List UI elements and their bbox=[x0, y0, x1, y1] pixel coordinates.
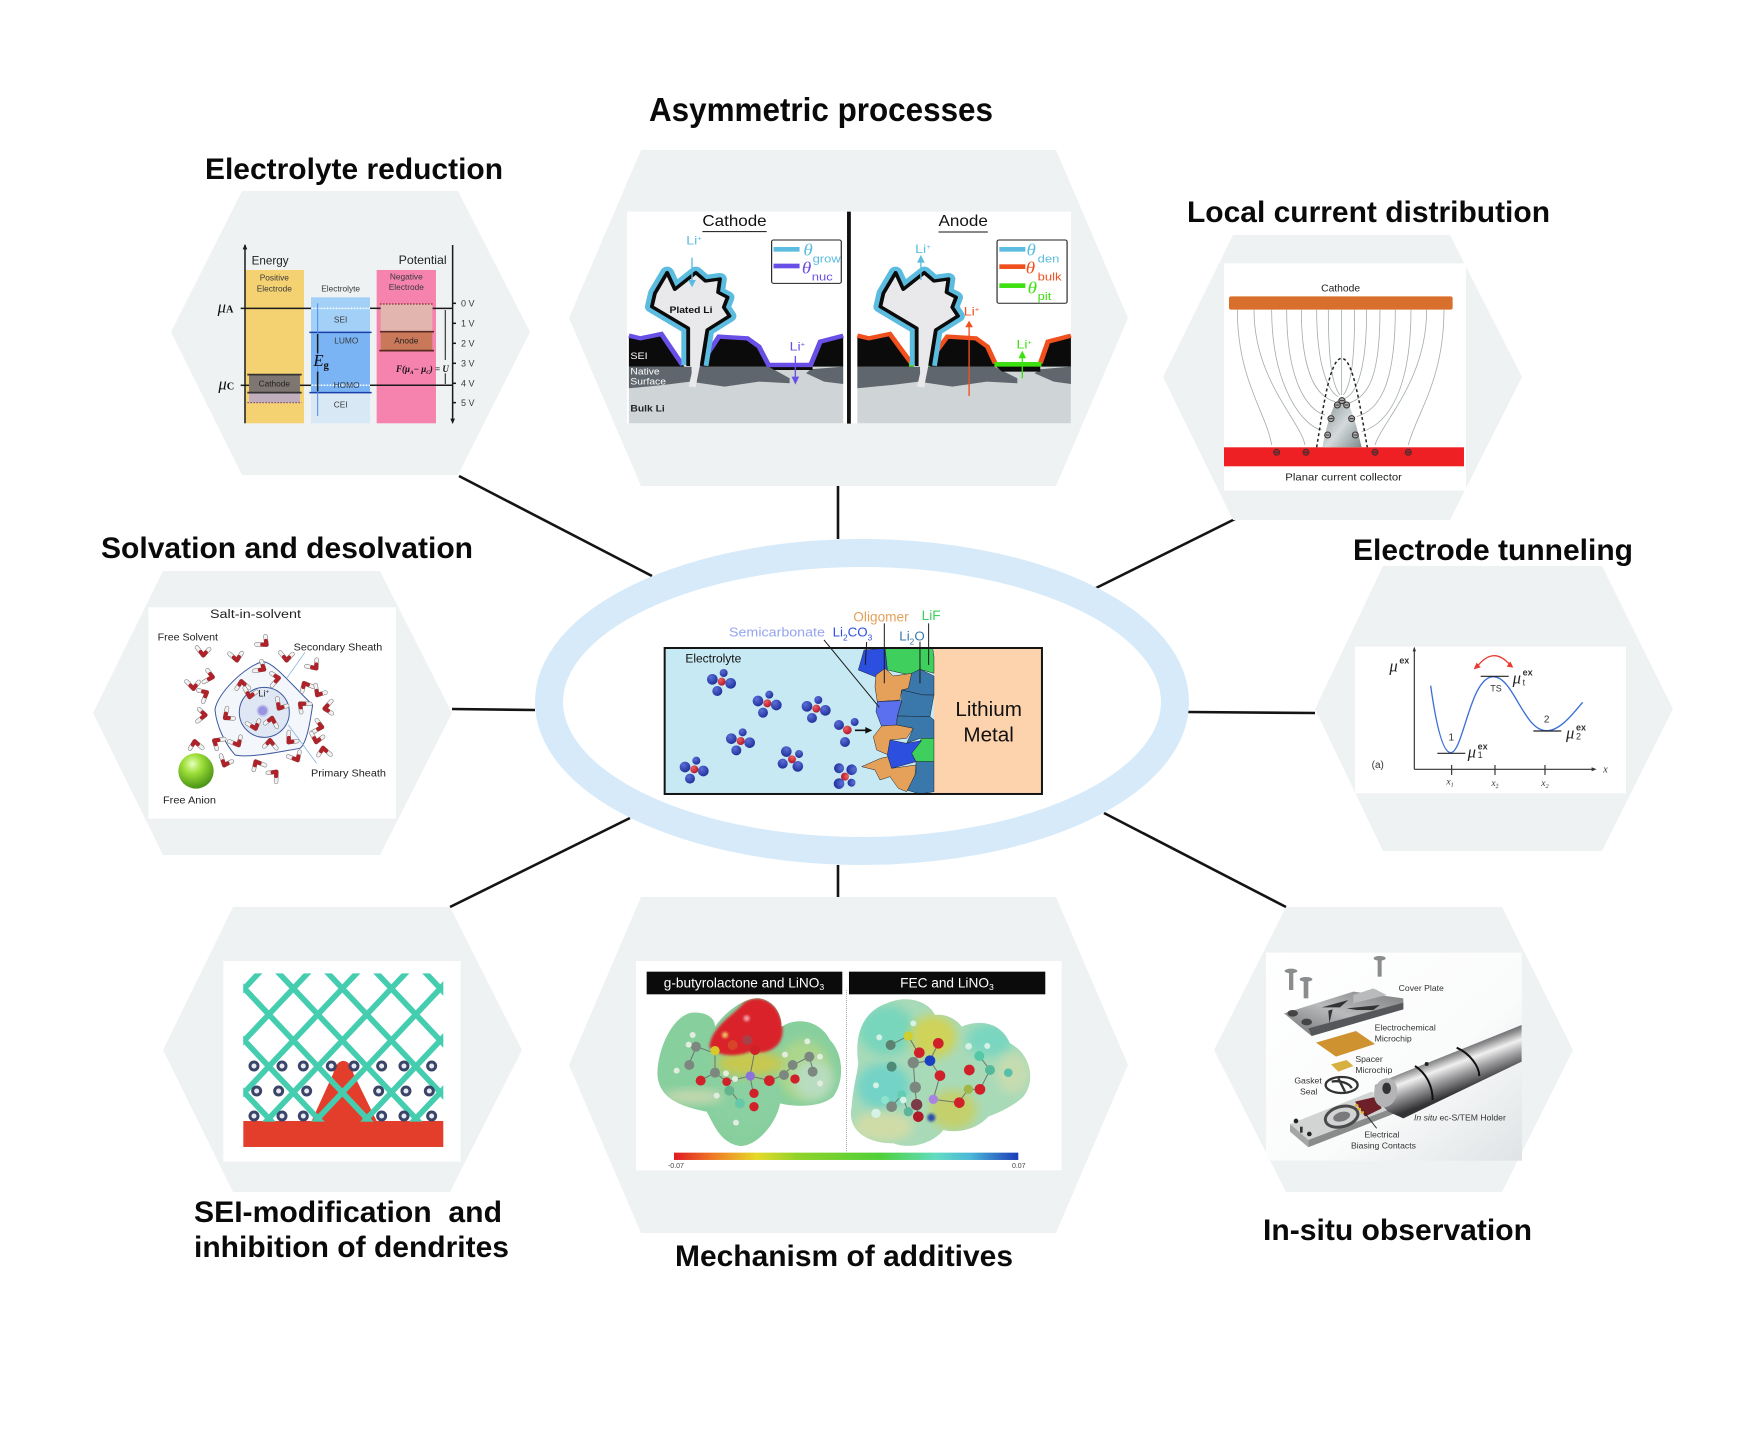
heading: In-situ observation bbox=[1263, 1214, 1532, 1247]
labels: Free Anion bbox=[163, 796, 216, 807]
chart labels: 1 bbox=[1478, 750, 1483, 760]
labels: Primary Sheath bbox=[311, 769, 386, 780]
cathode bar bbox=[1229, 296, 1453, 310]
energy landscape chart bbox=[1355, 647, 1626, 793]
sheath leader lines bbox=[287, 652, 317, 763]
header bars bbox=[647, 972, 1045, 994]
solvation figure bbox=[148, 607, 396, 819]
SEI schematic bbox=[665, 608, 1042, 795]
chart labels: (a) bbox=[1372, 760, 1384, 771]
Li+ arrows bbox=[688, 255, 1026, 396]
heading: Mechanism of additives bbox=[675, 1240, 1013, 1273]
heading: inhibition of dendrites bbox=[194, 1231, 509, 1264]
screws bbox=[1285, 956, 1386, 998]
connector lines bbox=[450, 476, 1315, 907]
process labels: + bbox=[697, 235, 702, 242]
header bars: 3 bbox=[819, 982, 824, 992]
holder tip plate bbox=[1290, 1092, 1397, 1147]
lithium wedge over lattice bbox=[325, 1100, 362, 1121]
process labels bbox=[630, 233, 1032, 414]
TEM holder figure bbox=[1266, 953, 1522, 1161]
negative electrode column bbox=[377, 270, 436, 423]
free anion bbox=[178, 753, 214, 789]
anode legend bbox=[997, 240, 1067, 303]
chart labels bbox=[1372, 655, 1608, 790]
right atoms bbox=[871, 1020, 1013, 1122]
field lines bbox=[1237, 310, 1444, 445]
box outline bbox=[665, 648, 1042, 794]
process labels: Plated Li bbox=[669, 306, 712, 316]
process labels: Li bbox=[1017, 337, 1028, 351]
labels: Planar current collector bbox=[1285, 472, 1403, 483]
lithium base and dendrite bbox=[243, 1061, 443, 1147]
hexagon bbox=[569, 897, 1128, 1233]
dotted divider bbox=[845, 990, 847, 1152]
panel: asymmetric processes bbox=[569, 91, 1128, 486]
hexagon bbox=[569, 150, 1128, 486]
current collector figure bbox=[1224, 263, 1466, 491]
electrostatic potential maps bbox=[636, 961, 1062, 1170]
primary sheath bbox=[239, 687, 289, 737]
axis arrowheads bbox=[1413, 647, 1597, 771]
colour scale bbox=[668, 1153, 1026, 1170]
diagram labels: μC bbox=[217, 374, 234, 393]
red current collector bbox=[1224, 447, 1464, 466]
level lines and axes bbox=[241, 245, 456, 423]
grain labels: Li bbox=[833, 625, 843, 640]
diagram labels: SEI bbox=[334, 315, 347, 325]
central divider bbox=[847, 212, 851, 424]
chart labels: ex bbox=[1576, 723, 1586, 733]
electrochemical microchip bbox=[1316, 1031, 1375, 1057]
grain labels: 2 bbox=[910, 637, 915, 647]
chart labels: x bbox=[1446, 776, 1451, 787]
cathode legend bbox=[772, 240, 841, 283]
diagram labels: 1 V bbox=[461, 319, 474, 329]
chart labels: TS bbox=[1490, 683, 1502, 693]
white background bbox=[223, 961, 461, 1162]
anode block bbox=[379, 304, 434, 351]
secondary sheath bbox=[215, 662, 313, 756]
labels: Microchip bbox=[1355, 1065, 1393, 1075]
labels bbox=[1285, 283, 1403, 483]
anode legend: θ bbox=[1028, 278, 1037, 297]
dashed envelope bbox=[1317, 358, 1367, 447]
grain labels: Metal bbox=[963, 724, 1014, 747]
grain labels: 2 bbox=[843, 633, 848, 643]
labels: Cover Plate bbox=[1399, 983, 1444, 993]
positive electrode column bbox=[245, 270, 304, 423]
heading: Solvation and desolvation bbox=[101, 532, 473, 565]
diagram labels: Electrode bbox=[257, 283, 292, 293]
cathode legend: θ bbox=[803, 240, 813, 259]
labels bbox=[1294, 983, 1506, 1151]
cathode legend: nuc bbox=[812, 270, 833, 283]
labels: Seal bbox=[1300, 1087, 1317, 1097]
arrow into SEI bbox=[855, 727, 872, 734]
diagram labels: − μ bbox=[414, 364, 426, 374]
grain labels: 3 bbox=[868, 633, 873, 643]
labels: Free Solvent bbox=[158, 633, 218, 644]
white background bbox=[636, 961, 1062, 1170]
labels: Spacer bbox=[1355, 1054, 1383, 1064]
grain labels bbox=[685, 608, 1022, 747]
white background bbox=[1224, 263, 1466, 491]
panel: electrolyte reduction bbox=[171, 153, 530, 475]
labels: Electrical bbox=[1364, 1130, 1400, 1140]
anode legend: pit bbox=[1038, 290, 1052, 303]
diagram labels: 0 V bbox=[461, 299, 474, 309]
colour scale: -0.07 bbox=[668, 1163, 684, 1170]
axes bbox=[1414, 648, 1593, 775]
chart labels: ex bbox=[1399, 655, 1409, 665]
labels bbox=[158, 607, 386, 807]
grain labels: LiF bbox=[922, 608, 941, 623]
diagram labels: 4 V bbox=[461, 379, 474, 389]
diagram labels: F(μ bbox=[396, 364, 410, 374]
chart labels: x bbox=[1491, 778, 1496, 789]
electrolyte box bbox=[665, 648, 1042, 794]
red double arrow bbox=[1474, 656, 1513, 669]
side titles: Cathode bbox=[702, 213, 767, 230]
chart labels: 2 bbox=[1544, 714, 1550, 725]
labels: Biasing Contacts bbox=[1351, 1141, 1417, 1151]
grain labels: CO bbox=[848, 625, 868, 640]
grain labels: Lithium bbox=[955, 698, 1022, 721]
diagram labels: ) = U bbox=[429, 364, 449, 374]
axis arrowheads bbox=[243, 244, 455, 424]
lithium ions bbox=[250, 1062, 436, 1120]
holder barrel bbox=[1371, 1025, 1522, 1118]
process labels: Li bbox=[964, 304, 975, 318]
grain labels: Semicarbonate bbox=[729, 626, 825, 640]
chart labels: μ bbox=[1467, 742, 1476, 761]
anode legend: bulk bbox=[1038, 270, 1062, 283]
process labels: Surface bbox=[630, 377, 666, 387]
right surface bbox=[848, 995, 1035, 1150]
chart labels: 2 bbox=[1576, 731, 1581, 741]
teal lattice bbox=[243, 973, 444, 1122]
anode legend: θ bbox=[1026, 258, 1035, 277]
diagram labels: Energy bbox=[252, 255, 289, 268]
cathode legend: θ bbox=[802, 258, 811, 277]
heading: Local current distribution bbox=[1187, 196, 1550, 229]
spacer microchip bbox=[1331, 1060, 1353, 1072]
panel: solvation and desolvation bbox=[93, 532, 473, 855]
anode side bbox=[857, 273, 1071, 423]
central panel: SEI on lithium metal bbox=[549, 553, 1175, 851]
labels: Electrochemical bbox=[1375, 1022, 1436, 1032]
blue curve bbox=[1431, 677, 1583, 753]
diagram labels: E bbox=[313, 351, 324, 370]
chart labels: 2 bbox=[1546, 784, 1549, 790]
anode legend: den bbox=[1038, 252, 1059, 265]
SEI grains bbox=[858, 648, 934, 794]
chart labels: ex bbox=[1478, 741, 1488, 751]
heading bbox=[194, 1196, 509, 1264]
diagram labels bbox=[217, 254, 474, 410]
diagram labels: Potential bbox=[399, 254, 447, 267]
labels: Li bbox=[258, 689, 266, 699]
hexagon bbox=[1315, 566, 1673, 851]
diagram labels: 5 V bbox=[461, 398, 474, 408]
electrolyte column bbox=[311, 297, 370, 423]
white background bbox=[1355, 647, 1626, 793]
process labels: Li bbox=[686, 233, 697, 247]
diagram labels: Positive bbox=[260, 273, 289, 283]
hexagon bbox=[171, 191, 530, 475]
heading: Electrode tunneling bbox=[1353, 534, 1633, 567]
side titles bbox=[702, 213, 988, 232]
cathode block bbox=[247, 375, 302, 403]
solvent molecules bbox=[185, 636, 334, 783]
hexagon bbox=[163, 907, 522, 1192]
lithium metal block bbox=[934, 648, 1042, 794]
panel: in-situ observation bbox=[1214, 907, 1573, 1247]
panel: mechanism of additives bbox=[569, 897, 1128, 1273]
chart labels: ‡ bbox=[1496, 784, 1500, 790]
labels: + bbox=[266, 689, 270, 695]
labels: Secondary Sheath bbox=[294, 643, 382, 654]
process labels: + bbox=[801, 341, 805, 348]
diagram labels: A bbox=[409, 370, 414, 376]
panel: SEI modification bbox=[163, 907, 522, 1258]
diagram labels: CEI bbox=[334, 400, 348, 410]
diagram labels: C bbox=[426, 370, 430, 376]
lithium ion bbox=[257, 705, 268, 716]
side titles: Anode bbox=[938, 213, 988, 230]
grain labels: Li bbox=[899, 629, 910, 644]
gasket seal bbox=[1326, 1077, 1358, 1093]
chart labels: x bbox=[1541, 778, 1546, 789]
electrons bbox=[1274, 398, 1411, 455]
hexagon bbox=[1163, 235, 1522, 520]
process labels: Native bbox=[630, 367, 660, 377]
grain labels: O bbox=[914, 629, 925, 644]
process labels: + bbox=[926, 243, 931, 251]
labels: In situ ec-S/TEM Holder bbox=[1414, 1112, 1506, 1122]
dendrite bbox=[1322, 397, 1362, 447]
diagram labels: μA bbox=[217, 298, 234, 317]
process labels: SEI bbox=[630, 352, 648, 362]
diagram labels: g bbox=[324, 361, 330, 372]
cover plate bbox=[1284, 988, 1403, 1036]
ring ellipse bbox=[549, 553, 1175, 851]
header bars: g-butyrolactone and LiNO bbox=[664, 975, 819, 990]
chart labels: t bbox=[1523, 677, 1526, 687]
cathode legend: grow bbox=[813, 252, 841, 265]
cathode and anode schematic bbox=[627, 212, 1071, 424]
anode legend: θ bbox=[1027, 240, 1036, 259]
hexagon bbox=[1214, 907, 1573, 1192]
panel: electrode tunneling bbox=[1315, 534, 1673, 851]
process labels: Bulk Li bbox=[630, 404, 665, 414]
chart labels: 1 bbox=[1451, 782, 1454, 788]
chart labels: μ bbox=[1565, 723, 1574, 742]
chart labels: x bbox=[1602, 765, 1608, 776]
diagram labels: Electrolyte bbox=[321, 284, 360, 294]
chart labels: μ bbox=[1388, 656, 1398, 675]
level markers bbox=[1437, 676, 1561, 753]
hexagon bbox=[93, 571, 452, 855]
diagram labels: HOMO bbox=[334, 380, 360, 390]
header bars: FEC and LiNO bbox=[900, 975, 989, 990]
left surface bbox=[653, 995, 847, 1150]
white background bbox=[148, 607, 396, 819]
process labels: Li bbox=[790, 339, 801, 353]
process labels: + bbox=[975, 306, 979, 314]
energy diagram bbox=[217, 244, 474, 424]
labels: Cathode bbox=[1321, 283, 1360, 294]
process labels: Li bbox=[915, 242, 926, 256]
chart labels: 1 bbox=[1449, 733, 1455, 744]
grain labels: Electrolyte bbox=[685, 652, 742, 666]
labels: Microchip bbox=[1375, 1033, 1412, 1043]
background bbox=[1266, 953, 1522, 1161]
chart labels: μ bbox=[1512, 668, 1521, 687]
diagram labels: 3 V bbox=[461, 359, 474, 369]
cathode side bbox=[629, 273, 843, 423]
diagram labels: Anode bbox=[394, 336, 419, 346]
salt molecules bbox=[680, 669, 863, 795]
diagram labels: LUMO bbox=[334, 335, 359, 345]
chart labels: ex bbox=[1523, 667, 1533, 677]
process labels: + bbox=[1028, 339, 1032, 346]
grain labels: Oligomer bbox=[853, 610, 909, 625]
diagram labels: Cathode bbox=[259, 379, 290, 389]
heading: SEI-modification and bbox=[194, 1196, 502, 1229]
diagram labels: Negative bbox=[390, 272, 423, 282]
header bars: 3 bbox=[989, 982, 994, 992]
colour scale: 0.07 bbox=[1012, 1163, 1026, 1170]
panel: local current distribution bbox=[1163, 196, 1550, 520]
left atoms bbox=[674, 1032, 823, 1126]
diagram labels: Electrode bbox=[389, 282, 424, 292]
heading: Electrolyte reduction bbox=[205, 153, 503, 186]
labels: Salt-in-solvent bbox=[210, 607, 302, 621]
diagram labels: 2 V bbox=[461, 339, 474, 349]
leader lines bbox=[824, 623, 929, 707]
heading: Asymmetric processes bbox=[649, 91, 993, 128]
labels: Gasket bbox=[1294, 1076, 1322, 1086]
lattice figure bbox=[224, 961, 460, 1162]
white background bbox=[627, 212, 1071, 423]
